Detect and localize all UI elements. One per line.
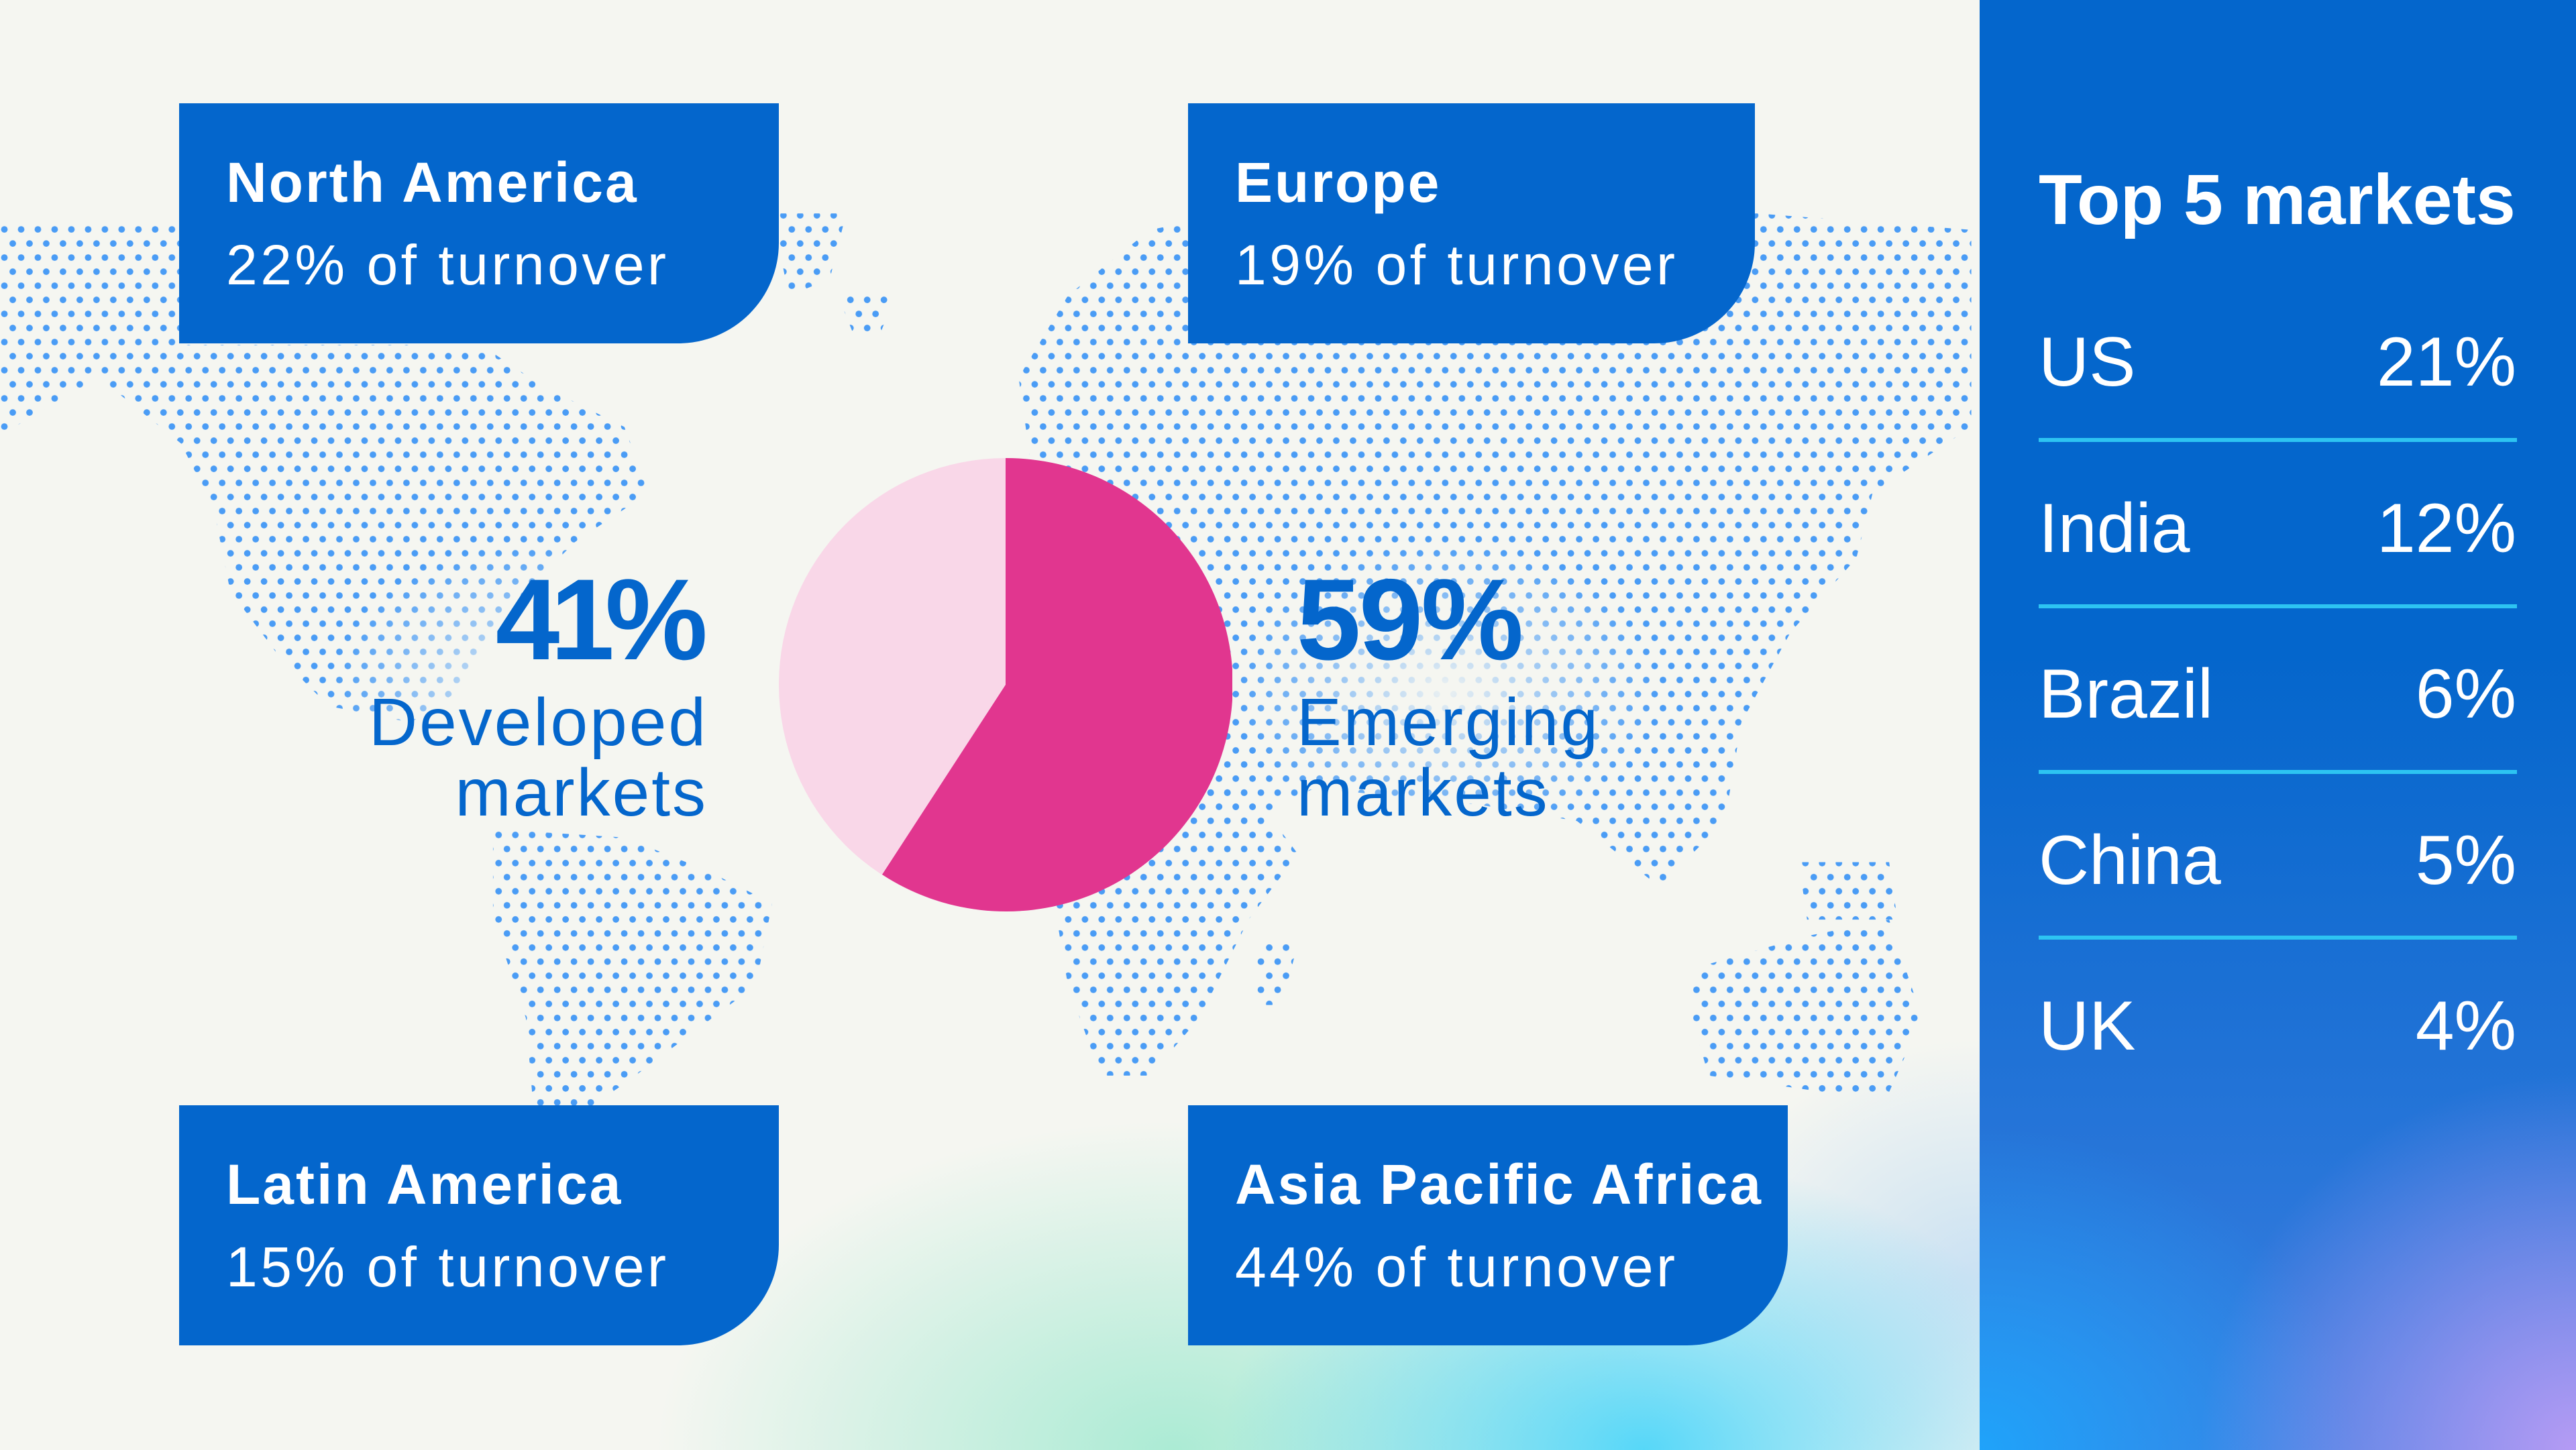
text: 15% of turnover: 15% of turnover xyxy=(226,1235,669,1298)
row: Brazil xyxy=(2039,655,2516,733)
stat: 59% emerging: 59% xyxy=(1297,555,1521,684)
title: Asia Pacific Africa: Asia Pacific Africa xyxy=(1235,1153,1763,1216)
pie chart xyxy=(779,458,1232,911)
row: UK: 4% xyxy=(2416,987,2516,1065)
stat: 41% developed xyxy=(369,555,708,830)
row: China: 5% xyxy=(2416,822,2516,899)
heading: Top 5 markets xyxy=(2039,160,2516,239)
text: 22% of turnover: 22% of turnover xyxy=(226,233,669,296)
stat: 41% developed: 41% xyxy=(496,555,698,684)
row: US xyxy=(2039,323,2516,401)
text: 19% of turnover: 19% of turnover xyxy=(1235,233,1678,296)
title: Latin America: Latin America xyxy=(226,1153,623,1216)
row: India: 12% xyxy=(2377,490,2516,567)
panel: top 5 markets xyxy=(1980,0,2576,1450)
panel: Latin America xyxy=(179,1105,779,1345)
row: US: US xyxy=(2039,323,2135,401)
stat: 59% emerging: markets xyxy=(1297,755,1550,830)
row: China: China xyxy=(2039,822,2221,899)
title: North America: North America xyxy=(226,151,639,214)
row: India: India xyxy=(2039,490,2190,567)
row: Brazil: 6% xyxy=(2416,655,2516,733)
row: China xyxy=(2039,822,2516,899)
row: UK xyxy=(2039,987,2516,1065)
panel: Asia Pacific Africa xyxy=(1188,1105,1788,1345)
stat: 59% emerging xyxy=(1297,555,1600,830)
row: India xyxy=(2039,490,2516,567)
row: Brazil: Brazil xyxy=(2039,655,2213,733)
panel: Europe xyxy=(1188,103,1755,343)
row: UK: UK xyxy=(2039,987,2135,1065)
stat: 59% emerging: Emerging xyxy=(1297,685,1600,760)
title: Europe: Europe xyxy=(1235,151,1441,214)
text: 44% of turnover: 44% of turnover xyxy=(1235,1235,1678,1298)
stat: 41% developed: markets xyxy=(455,755,708,830)
row: US: 21% xyxy=(2377,323,2516,401)
stat: 41% developed: Developed xyxy=(369,685,708,760)
panel: North America xyxy=(179,103,779,343)
